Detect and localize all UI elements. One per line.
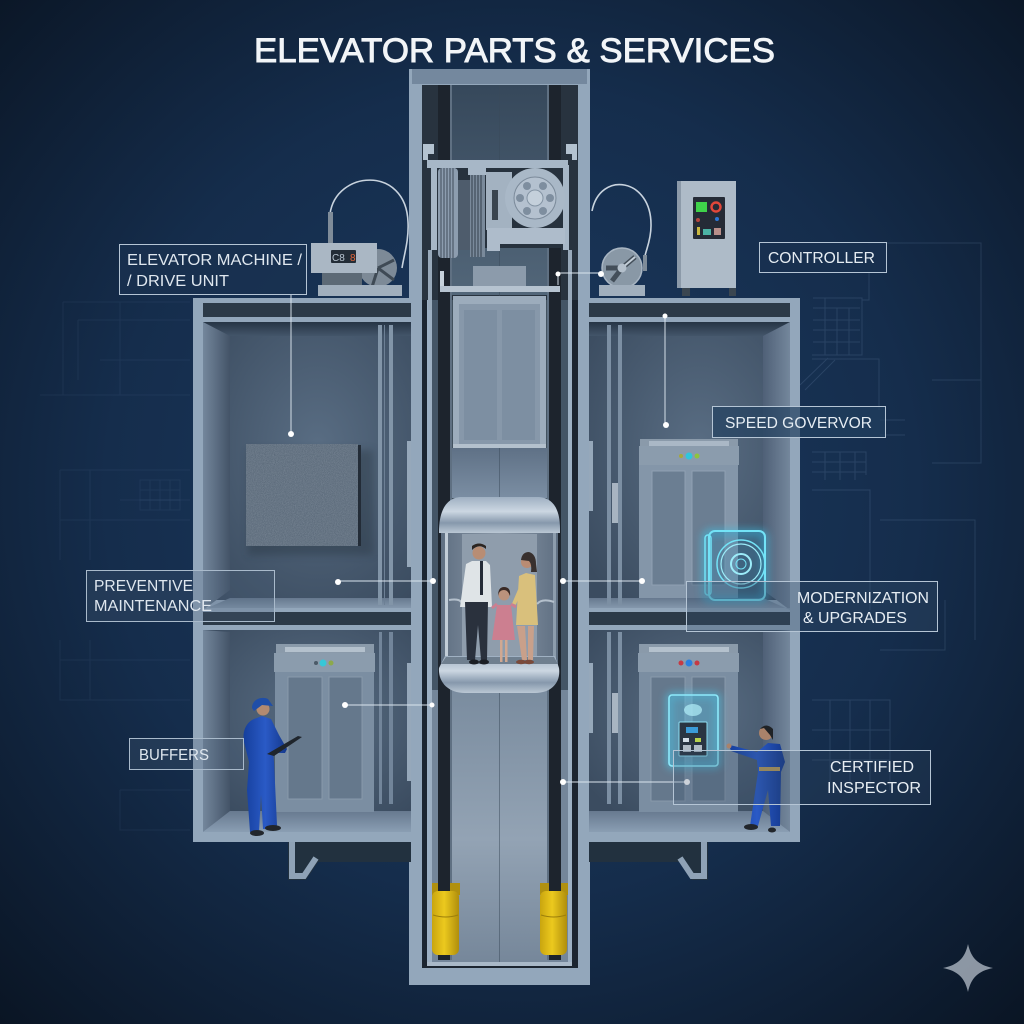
worker: left with clipboard: [244, 698, 302, 836]
title: ELEVATOR PARTS & SERVICES: [254, 32, 775, 70]
right building: [589, 298, 800, 842]
label: certified inspector: CERTIFIED: [830, 759, 914, 776]
icon: left machine on roof: [311, 180, 408, 296]
worker: right inspector: [726, 726, 785, 832]
label: speed governor: SPEED GOVERVOR: [725, 415, 872, 432]
base plinth right: [589, 842, 708, 880]
label: certified inspector: [674, 750, 930, 804]
label: controller: [760, 242, 886, 272]
blueprint drawing right: [800, 243, 981, 790]
label: elevator machine: / DRIVE UNIT: [127, 273, 229, 290]
label: speed governor: [712, 406, 886, 438]
connector lines: [291, 273, 687, 782]
label: buffers: [130, 738, 244, 770]
connector dots: [288, 271, 690, 785]
label: buffers: BUFFERS: [139, 747, 209, 764]
blue hologram: modernization icon: [705, 531, 765, 600]
plinth outline left: [292, 842, 316, 876]
central shaft outer frame: [409, 69, 590, 985]
label: modernization and upgrades: MODERNIZATION: [797, 590, 929, 607]
label: controller: CONTROLLER: [768, 250, 875, 267]
label: preventive maintenance: [86, 570, 274, 622]
upper-right door: [639, 439, 739, 598]
icon: left machine on roof: C8: [332, 253, 345, 264]
yellow buffers: [432, 840, 568, 955]
label: preventive maintenance: MAINTENANCE: [94, 598, 212, 615]
indicators: [612, 483, 618, 523]
left sheaves: [438, 168, 485, 258]
girl: [492, 587, 516, 662]
rails: [378, 325, 393, 605]
lower-left door: [274, 644, 375, 812]
icon: controller cabinet: [677, 181, 736, 296]
base plinth left: [288, 842, 411, 880]
left building: [193, 298, 411, 842]
elevator cabin: [439, 497, 560, 693]
label: preventive maintenance: PREVENTIVE: [94, 578, 193, 595]
blueprint drawing left: [40, 302, 190, 830]
grey block: [246, 444, 373, 555]
label: elevator machine: [120, 244, 306, 294]
plinth outline right: [680, 842, 704, 876]
label: certified inspector: INSPECTOR: [827, 780, 921, 797]
drive wheel: [505, 168, 565, 228]
lower-right door: [638, 644, 739, 812]
cabin floor: [439, 656, 559, 693]
woman: [514, 552, 538, 664]
guide rails: [438, 85, 450, 960]
label: elevator machine: ELEVATOR MACHINE /: [127, 252, 303, 269]
cabin roof: [439, 497, 560, 533]
upper counterweight panel: [453, 296, 546, 448]
icon: sparkle watermark: [943, 944, 993, 992]
icon: speed governor wheel: [592, 185, 651, 296]
blue hologram: inspection panel: [669, 695, 718, 766]
label: modernization and upgrades: [686, 582, 938, 632]
label: modernization and upgrades: & UPGRADES: [803, 610, 907, 627]
side strips: [427, 300, 432, 962]
man: [460, 544, 492, 664]
icon: left machine on roof: 8: [350, 253, 356, 264]
machine in shaft: [423, 144, 577, 310]
